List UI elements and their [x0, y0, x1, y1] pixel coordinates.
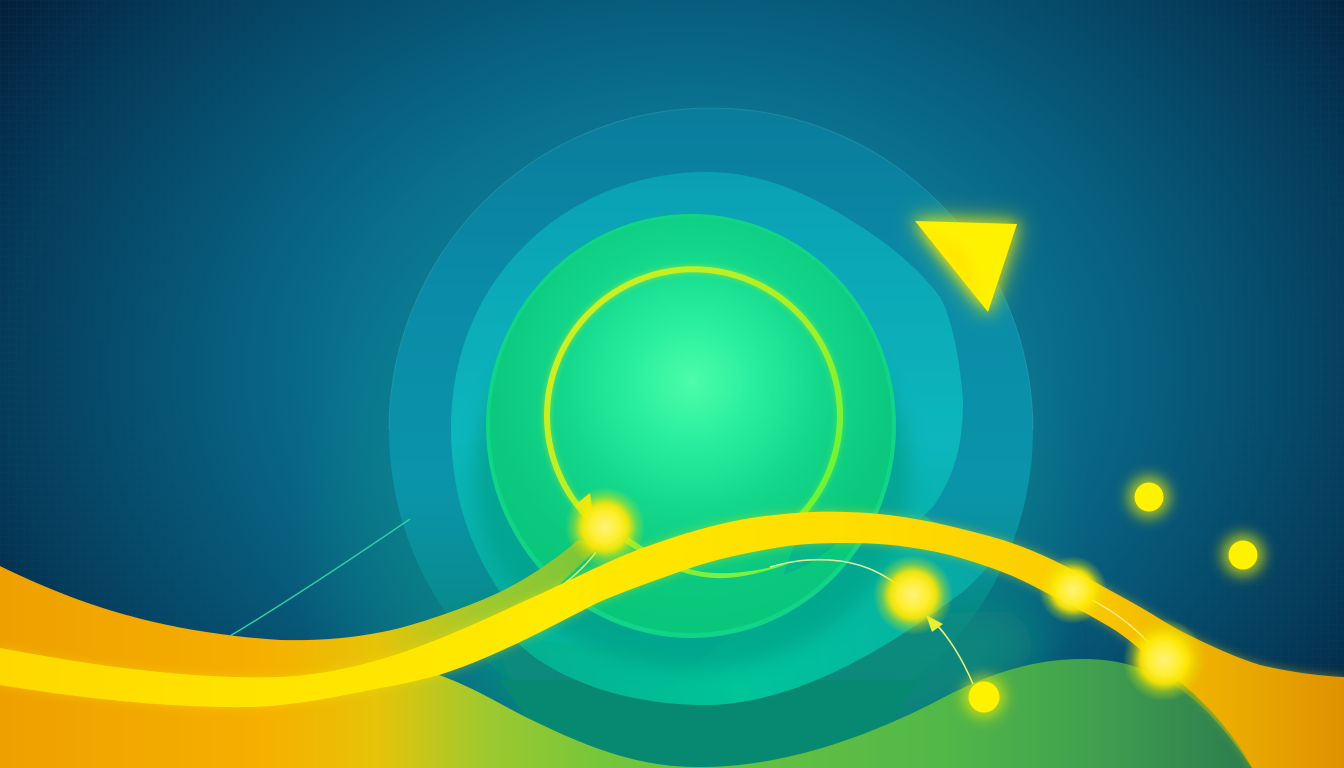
teal band reaching the hill — [500, 680, 920, 768]
arrowhead — [926, 615, 943, 632]
glowing node on ribbon — [1039, 556, 1107, 624]
ring glow — [547, 269, 840, 526]
thin pale line under node — [552, 552, 596, 592]
olive sliver beside hill — [1140, 650, 1265, 768]
middle circle — [451, 172, 963, 670]
thin connector to node — [770, 560, 898, 585]
thin line on right ribbon — [1092, 600, 1150, 644]
lower dot — [963, 676, 1005, 718]
inner green circle — [486, 214, 896, 638]
soft teal glow above the hill — [480, 610, 1050, 750]
ring lower arc tapering — [625, 537, 790, 578]
lower crescent of middle circle — [500, 420, 1003, 705]
glowing node on ring — [565, 487, 645, 567]
ring stroke — [547, 269, 840, 526]
yellow triangle marker — [912, 218, 1020, 316]
outer circle — [389, 108, 1033, 752]
floating dot right — [1222, 534, 1264, 576]
curved arrow from lower dot to node — [926, 615, 973, 684]
outer circle top rim — [389, 108, 1033, 430]
ring arrowhead — [575, 493, 593, 516]
ribbon glow — [0, 512, 1344, 768]
green circle wedge tip — [783, 530, 850, 575]
landscape: orange to green hill — [0, 540, 1252, 768]
floating dot upper — [1128, 476, 1170, 518]
shaded band around the green circle — [474, 280, 910, 670]
thin line to the left — [230, 519, 410, 636]
glowing node lower right — [1123, 619, 1205, 701]
glowing node center right — [873, 555, 953, 635]
glowing ring with arrow — [547, 269, 898, 585]
yellow ribbon — [0, 512, 1344, 768]
